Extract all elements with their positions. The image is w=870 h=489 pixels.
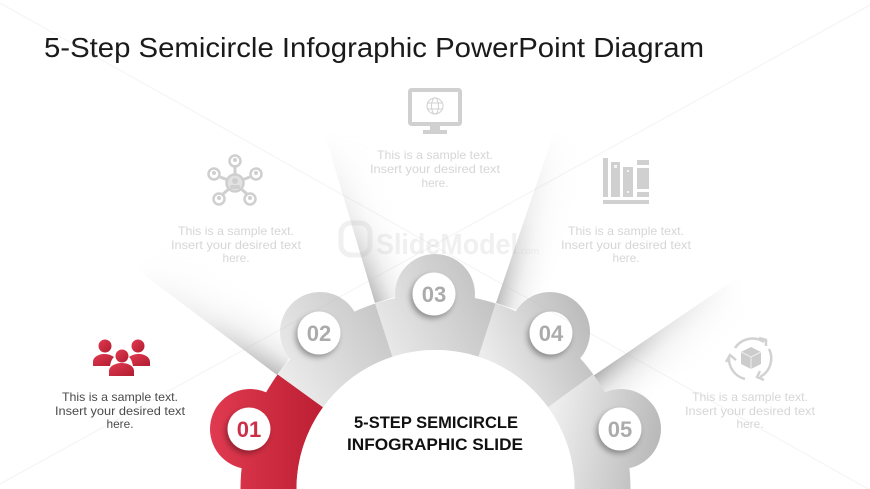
text: step 3: This is a sample text. bbox=[377, 148, 493, 162]
text: step 1: here. bbox=[106, 417, 134, 431]
badge 02: 02 bbox=[307, 321, 331, 346]
semicircle segment 02 bbox=[278, 292, 392, 407]
text: step 5 bbox=[685, 390, 816, 431]
text: step 1: This is a sample text. bbox=[62, 390, 178, 404]
center inner disc bbox=[296, 350, 574, 489]
shadow beam between steps 04 and 05 bbox=[594, 294, 714, 392]
text: step 3 bbox=[370, 148, 501, 190]
icon: books bbox=[603, 158, 649, 204]
badge 04: 04 bbox=[539, 321, 564, 346]
center heading bbox=[347, 413, 523, 454]
badge 03: 03 bbox=[422, 282, 446, 307]
watermark: SlideModel bbox=[376, 229, 518, 261]
center heading: INFOGRAPHIC SLIDE bbox=[347, 435, 523, 454]
text: step 1: Insert your desired text bbox=[55, 404, 186, 418]
title: 5-Step Semicircle Infographic PowerPoint Diagram bbox=[44, 32, 704, 63]
text: step 4: Insert your desired text bbox=[561, 238, 692, 252]
center heading: 5-STEP SEMICIRCLE bbox=[354, 413, 518, 432]
watermark: .com bbox=[518, 246, 539, 256]
text: step 2 bbox=[171, 224, 302, 265]
text: step 4: here. bbox=[612, 251, 640, 265]
icon: box with cycle arrows bbox=[726, 338, 771, 380]
semicircle segment 01 bbox=[210, 374, 323, 489]
shadow beam between steps 03 and 04 bbox=[496, 171, 542, 310]
text: step 5: Insert your desired text bbox=[685, 404, 816, 418]
text: step 3: Insert your desired text bbox=[370, 162, 501, 176]
text: step 2: here. bbox=[222, 251, 250, 265]
icon: monitor with globe bbox=[410, 90, 460, 134]
badge 01: 01 bbox=[237, 417, 261, 442]
text: step 4 bbox=[561, 224, 692, 265]
icon: people bbox=[93, 340, 150, 376]
badge 05: 05 bbox=[608, 417, 632, 442]
text: step 3: here. bbox=[422, 176, 448, 190]
text: step 5: here. bbox=[736, 417, 764, 431]
shadow beam between steps 01 and 02 bbox=[170, 293, 290, 375]
text: step 4: This is a sample text. bbox=[568, 224, 684, 238]
text: step 5: This is a sample text. bbox=[692, 390, 808, 404]
text: step 1 bbox=[55, 390, 186, 431]
semicircle segment 03 bbox=[375, 254, 496, 357]
semicircle segment 05 bbox=[548, 374, 661, 489]
text: step 2: This is a sample text. bbox=[178, 224, 294, 238]
text: step 2: Insert your desired text bbox=[171, 238, 302, 252]
semicircle segment 04 bbox=[478, 292, 593, 407]
watermark bbox=[341, 223, 539, 261]
shadow beam between steps 02 and 03 bbox=[337, 172, 398, 303]
icon: network bbox=[208, 156, 262, 204]
